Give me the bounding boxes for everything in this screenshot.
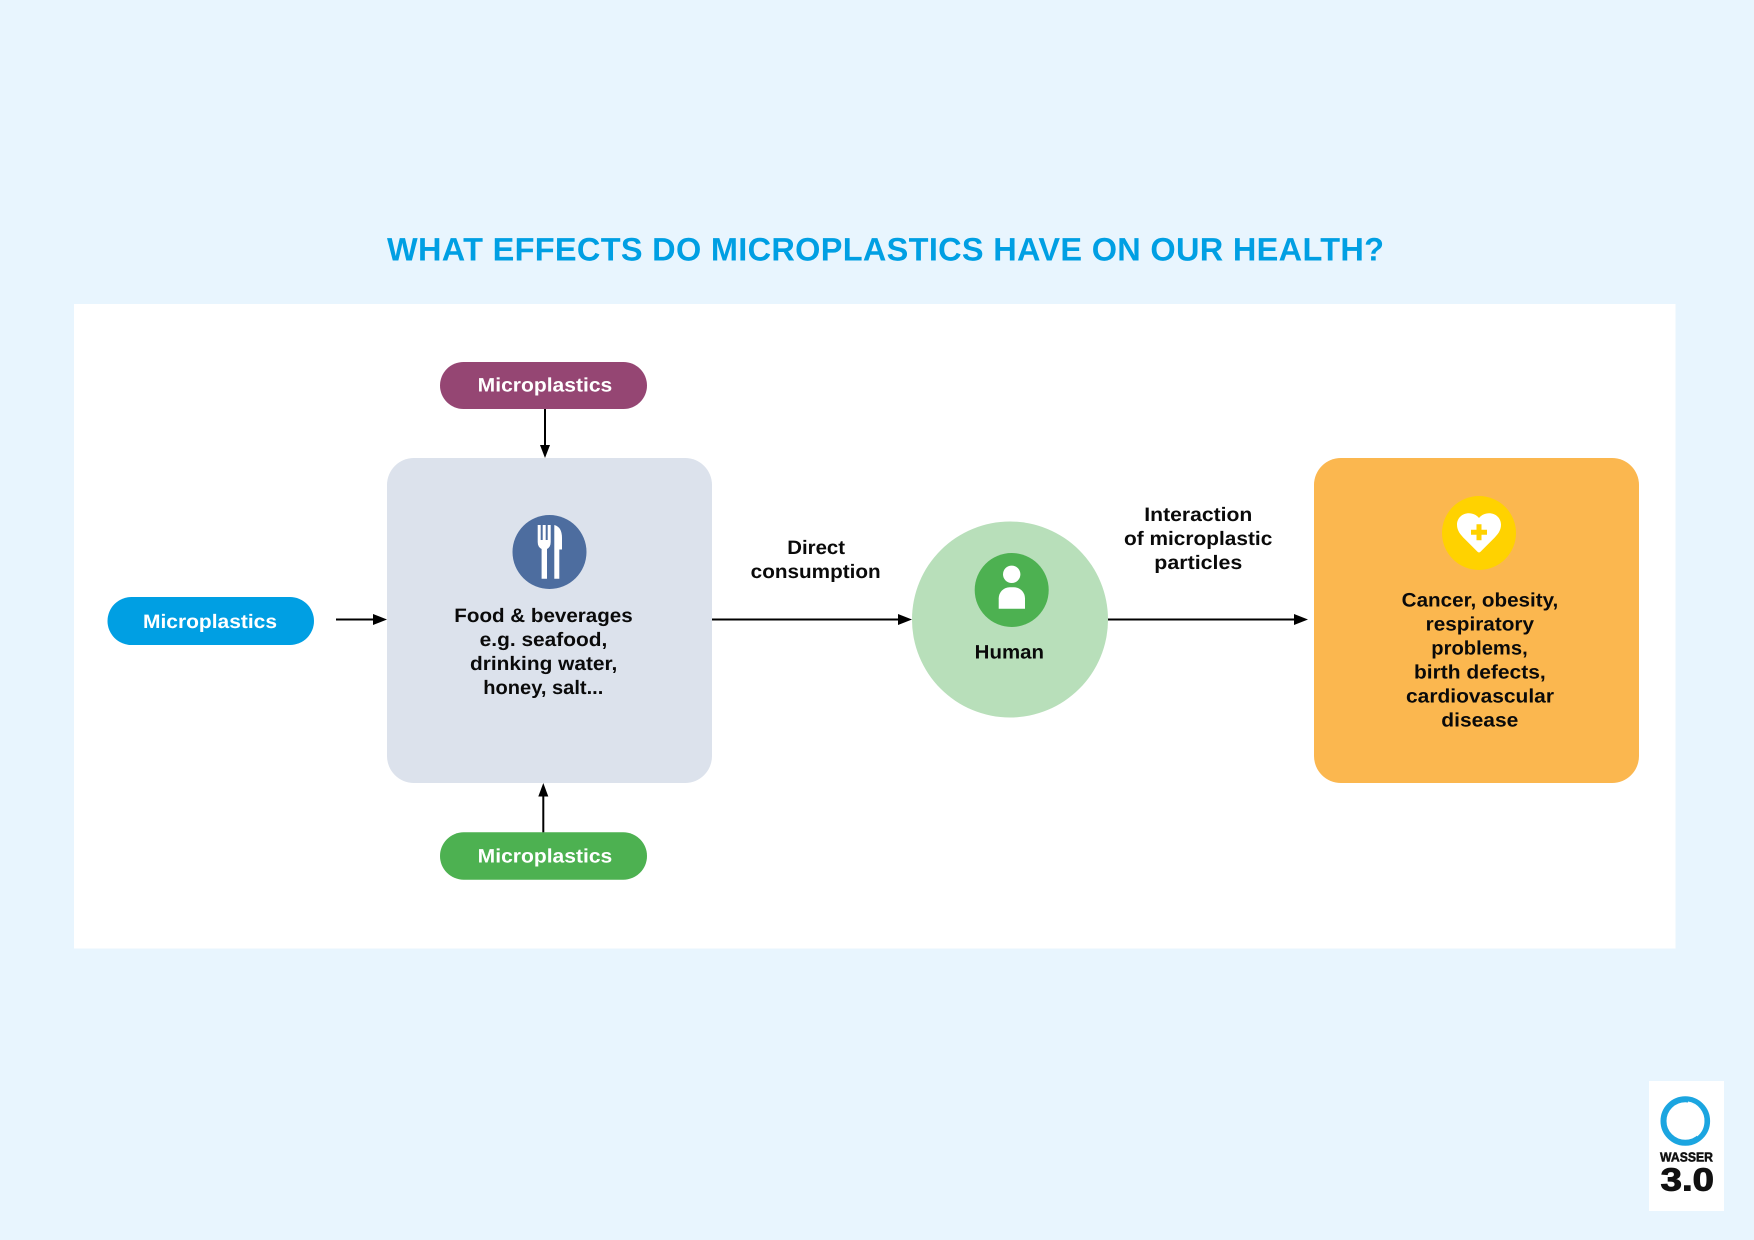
title: WHAT EFFECTS DO MICROPLASTICS HAVE ON OUR HEALTH? xyxy=(387,232,1384,268)
icon: fork and knife xyxy=(512,515,586,589)
text: food and beverages: Food & beverages xyxy=(454,605,633,627)
panel: diagram background xyxy=(74,304,1676,948)
arrow: green pill to food xyxy=(538,783,548,832)
logo: Wasser 3.0: WASSER xyxy=(1660,1150,1714,1165)
text: food and beverages: honey, salt... xyxy=(483,677,603,699)
arrow: blue pill to food xyxy=(336,614,387,625)
label: interaction of microplastic particles: of microplastic xyxy=(1124,528,1272,550)
text: food and beverages xyxy=(454,605,633,699)
pill: microplastics (purple) xyxy=(440,362,647,409)
panel: food and beverages xyxy=(387,458,712,783)
text: food and beverages: drinking water, xyxy=(470,653,617,675)
text: food and beverages: e.g. seafood, xyxy=(480,629,607,651)
pill: microplastics (blue) xyxy=(108,597,314,645)
label: interaction of microplastic particles xyxy=(1124,504,1272,574)
text: health effects: disease xyxy=(1441,710,1518,732)
pill: microplastics (purple): Microplastics xyxy=(478,375,612,397)
arrow: human to health effects xyxy=(1108,614,1308,625)
label: interaction of microplastic particles: Interaction xyxy=(1144,504,1252,526)
label: interaction of microplastic particles: particles xyxy=(1154,552,1242,574)
icon: heart with cross xyxy=(1442,496,1516,570)
arrow: purple pill to food xyxy=(540,409,550,458)
pill: microplastics (green): Microplastics xyxy=(478,846,612,868)
logo: Wasser 3.0 xyxy=(1649,1081,1724,1211)
label: direct consumption: Direct xyxy=(787,537,846,559)
text: health effects: problems, xyxy=(1431,638,1528,660)
text: health effects: Cancer, obesity, xyxy=(1402,590,1558,612)
label: direct consumption xyxy=(751,537,881,583)
arrow: food to human xyxy=(712,614,912,625)
text: human: Human xyxy=(975,641,1044,663)
icon: person xyxy=(975,553,1049,627)
logo: Wasser 3.0: 3.0 xyxy=(1661,1162,1714,1198)
pill: microplastics (green) xyxy=(440,832,647,880)
text: health effects: cardiovascular xyxy=(1406,686,1554,708)
node: human xyxy=(912,522,1108,718)
panel: health effects xyxy=(1314,458,1639,783)
text: health effects: birth defects, xyxy=(1414,662,1546,684)
text: health effects xyxy=(1402,590,1558,732)
label: direct consumption: consumption xyxy=(751,561,881,583)
text: health effects: respiratory xyxy=(1426,614,1534,636)
pill: microplastics (blue): Microplastics xyxy=(143,611,277,633)
